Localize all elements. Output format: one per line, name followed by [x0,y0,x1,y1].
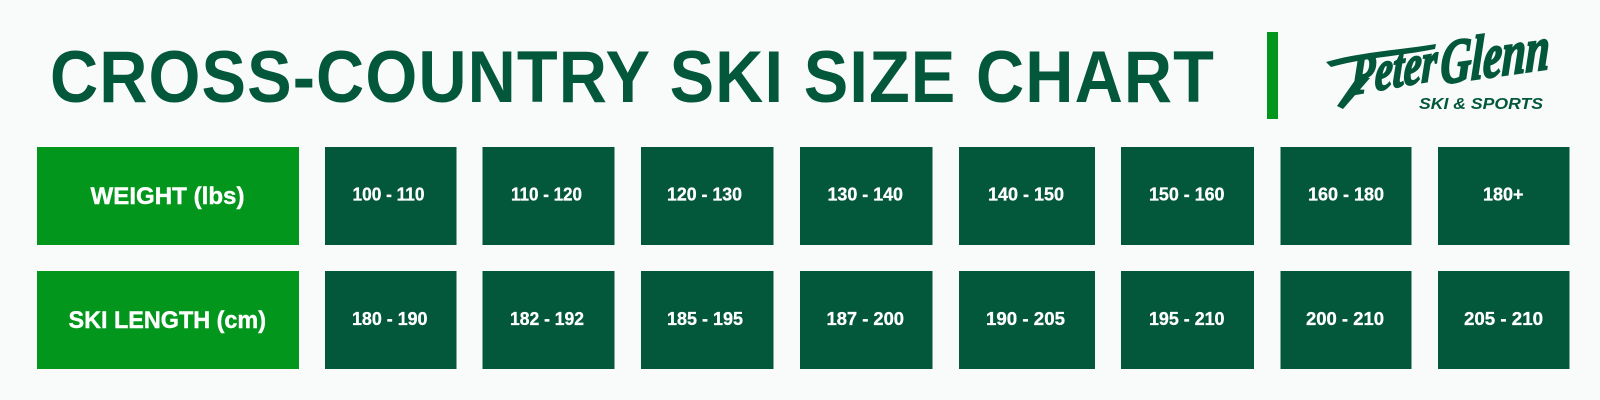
row label: weight [37,147,299,245]
cell: 180+ [1438,147,1570,245]
cell: 130-140: 130 - 140 [828,184,903,204]
logo: Peter Glenn Ski & Sports: SKI & SPORTS [1419,96,1543,113]
row: weight [37,147,1570,245]
cell: 200-210 [1280,271,1412,369]
cell: 110-120 [482,147,614,245]
vertical accent bar [1267,32,1278,119]
cell: 205-210 [1438,271,1570,369]
cell: 140-150: 140 - 150 [988,184,1064,204]
cell: 205-210: 205 - 210 [1464,309,1543,329]
cell: 180-190: 180 - 190 [352,309,428,329]
cell: 150-160: 150 - 160 [1149,184,1224,204]
cell: 100-110: 100 - 110 [352,184,424,204]
cell: 180-190 [325,271,456,369]
row label: ski length [37,271,299,369]
cell: 190-205 [959,271,1095,369]
cell: 100-110 [325,147,456,245]
cell: 195-210: 195 - 210 [1149,309,1224,329]
cell: 160-180: 160 - 180 [1308,184,1384,204]
logo: Peter Glenn Ski & Sports: Peter [1349,30,1439,108]
cell: 187-200: 187 - 200 [826,309,904,329]
cell: 140-150 [959,147,1095,245]
row label: weight: WEIGHT (lbs) [90,183,244,210]
cell: 182-192 [482,271,614,369]
row label: ski length: SKI LENGTH (cm) [68,307,266,334]
cell: 150-160 [1121,147,1254,245]
cell: 182-192: 182 - 192 [510,309,584,329]
row: ski length [37,271,1570,369]
cell: 185-195 [641,271,774,369]
logo: Peter Glenn Ski & Sports: Glenn [1440,12,1551,98]
cell: 180+: 180+ [1483,184,1524,204]
cell: 120-130: 120 - 130 [667,184,742,204]
cell: 185-195: 185 - 195 [667,309,743,329]
cell: 190-205: 190 - 205 [986,309,1065,329]
cell: 160-180 [1280,147,1412,245]
cell: 130-140 [800,147,932,245]
cell: 200-210: 200 - 210 [1306,309,1384,329]
cell: 195-210 [1121,271,1254,369]
title: CROSS-COUNTRY SKI SIZE CHART [50,37,1215,118]
cell: 120-130 [641,147,774,245]
cell: 110-120: 110 - 120 [511,184,582,204]
logo: Peter Glenn Ski & Sports [1326,12,1551,113]
cell: 187-200 [800,271,932,369]
